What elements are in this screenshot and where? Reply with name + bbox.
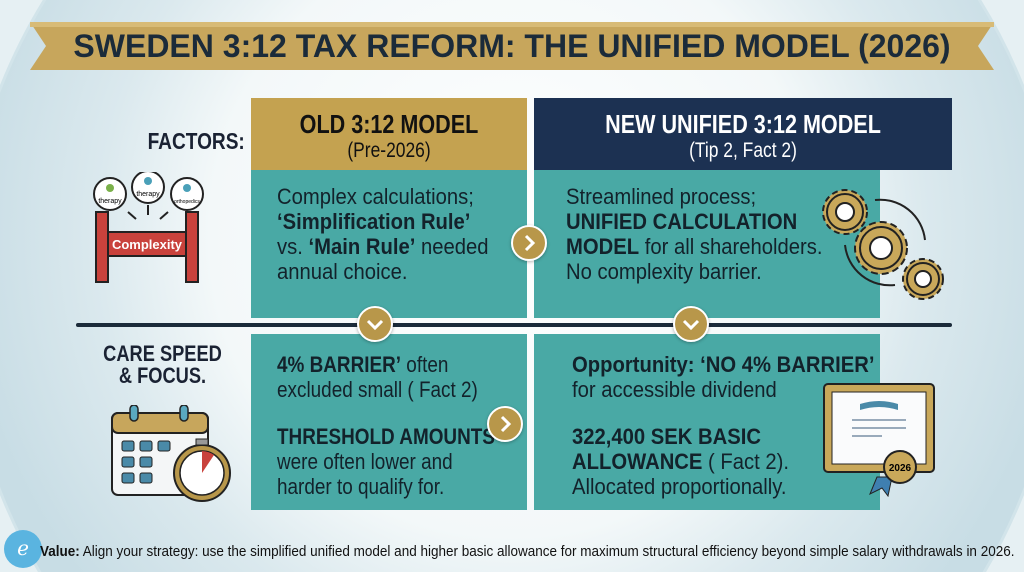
- panel: new top: No complexity barrier.: [566, 259, 762, 284]
- panel: new top: Streamlined process;: [566, 184, 756, 209]
- arrow: right top: [511, 225, 547, 261]
- label: factors: FACTORS:: [148, 128, 245, 154]
- divider: [76, 323, 952, 327]
- panel: new bottom: Opportunity: ‘NO 4% BARRIER’: [572, 352, 874, 377]
- label: care speed: [103, 341, 222, 388]
- label: care speed: & FOCUS.: [119, 363, 206, 388]
- panel: old top: ‘Simplification Rule’: [277, 209, 470, 234]
- panel: new header: NEW UNIFIED 3:12 MODEL: [605, 109, 881, 139]
- logo: ℯ: [17, 538, 29, 560]
- footer text: Value: Align your strategy: use the simplified unified model and higher basic allowance for maximum structural efficiency beyond simple salary withdrawals in 2026.: [40, 543, 1014, 560]
- icon: complexity barrier: Complexity: [112, 237, 183, 252]
- panel: old header: (Pre-2026): [347, 139, 431, 162]
- arrow: down old: [357, 306, 393, 342]
- icon: complexity barrier: [93, 172, 204, 283]
- panel: new bottom: [534, 334, 880, 510]
- panel: new bottom: ALLOWANCE ( Fact 2).: [572, 449, 789, 474]
- icon: complexity barrier: orthopedics: [174, 199, 200, 205]
- arrow: down new: [673, 306, 709, 342]
- icon: complexity barrier: therapy: [136, 191, 160, 198]
- panel: old bottom: 4% BARRIER’ often: [277, 352, 448, 377]
- icon: certificate: 2026: [889, 463, 912, 474]
- arrow: right bottom: [487, 406, 523, 442]
- panel: old header: OLD 3:12 MODEL: [300, 109, 478, 139]
- panel: old top: annual choice.: [277, 259, 408, 284]
- panel: old bottom: excluded small ( Fact 2) THRESHOLD AMOUNTS: [277, 377, 495, 449]
- panel: new top: UNIFIED CALCULATION: [566, 209, 797, 234]
- icon: certificate: [823, 383, 935, 497]
- icon: calendar stopwatch: [111, 405, 231, 502]
- panel: old top: Complex calculations;: [277, 184, 474, 209]
- icon: gears: [822, 189, 944, 300]
- panel: old header: [251, 98, 527, 170]
- title banner: [30, 22, 994, 70]
- panel: old top: vs. ‘Main Rule’ needed: [277, 234, 488, 259]
- panel: new bottom: Allocated proportionally.: [572, 474, 787, 499]
- panel: old bottom: harder to qualify for.: [277, 474, 444, 499]
- title banner: SWEDEN 3:12 TAX REFORM: THE UNIFIED MODEL (2026): [73, 28, 951, 64]
- panel: new top: MODEL for all shareholders.: [566, 234, 822, 259]
- panel: new bottom: for accessible dividend 322,400 SEK BASIC: [572, 377, 777, 449]
- panel: old bottom: [251, 334, 527, 510]
- panel: old top: [251, 170, 527, 318]
- panel: new header: [534, 98, 952, 170]
- logo: [4, 530, 42, 568]
- icon: complexity barrier: therapy: [98, 198, 122, 205]
- label: care speed: CARE SPEED: [103, 341, 222, 366]
- panel: new header: (Tip 2, Fact 2): [689, 139, 797, 162]
- panel: old bottom: were often lower and: [277, 449, 453, 474]
- panel: new top: [534, 170, 880, 318]
